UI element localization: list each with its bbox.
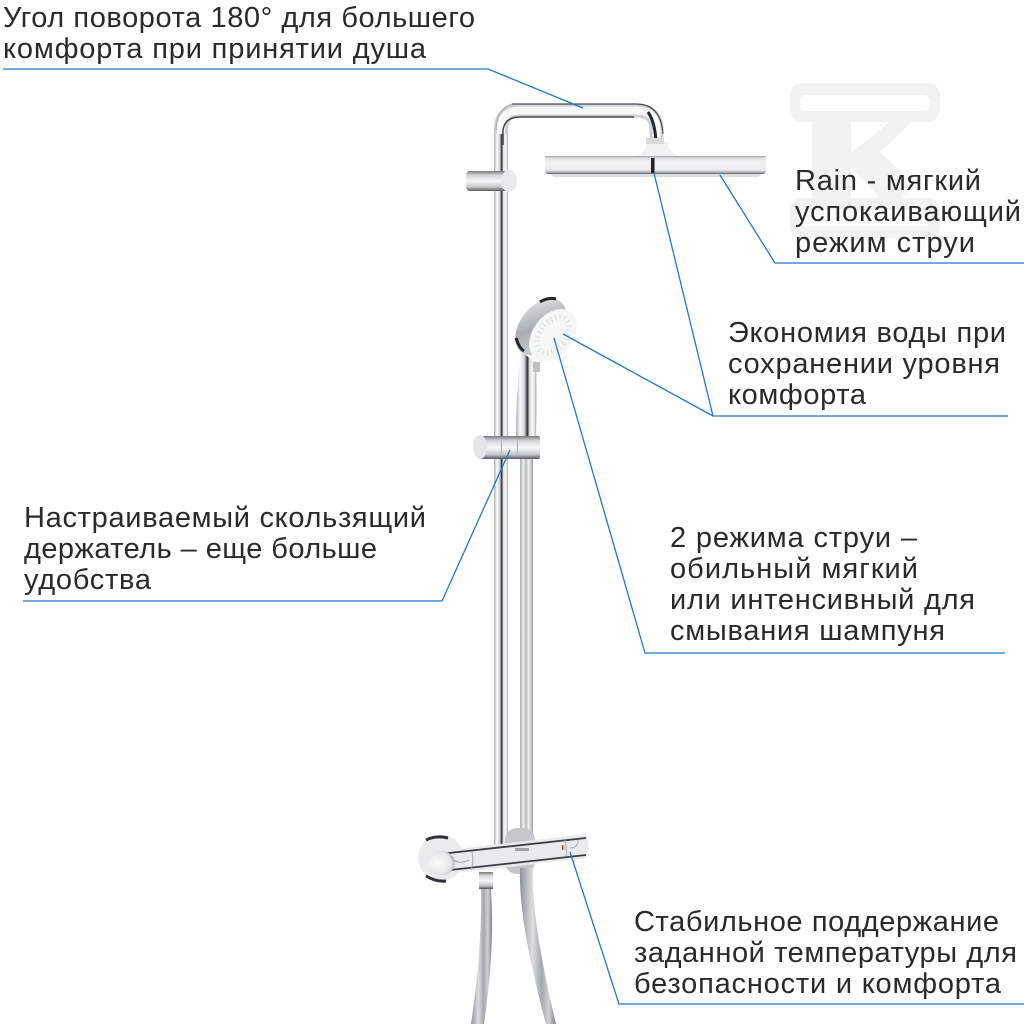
- watermark logo: [790, 83, 940, 238]
- thermostat mixer: [418, 828, 588, 881]
- callout: rain mode: режим струи: [795, 227, 975, 259]
- callout: swivel angle: комфорта при принятии душа: [3, 33, 427, 65]
- callout: rain mode: Rain - мягкий: [795, 165, 981, 197]
- callout: two spray modes: 2 режима струи –: [670, 522, 918, 554]
- overhead shower head: [545, 138, 766, 177]
- callout: stable temperature: Стабильное поддержание: [634, 906, 999, 938]
- callout: swivel angle: Угол поворота 180° для большего: [3, 2, 475, 34]
- rail bracket: [466, 170, 517, 192]
- callout: stable temperature: [570, 852, 1024, 1004]
- callout: two spray modes: смывания шампуня: [670, 615, 945, 647]
- hand shower: [505, 289, 587, 436]
- callout: water saving: сохранении уровня: [728, 348, 1000, 380]
- shower hoses: [471, 868, 556, 1024]
- callout: sliding holder: держатель – еще больше: [24, 533, 377, 565]
- callout: stable temperature: безопасности и комфорта: [634, 968, 1002, 1000]
- callout: water saving: комфорта: [728, 379, 867, 411]
- callout: stable temperature: заданной температуры для: [634, 937, 1017, 969]
- callout: sliding holder: удобства: [24, 564, 152, 596]
- callout: rain mode: [720, 165, 1024, 263]
- callout: sliding holder: Настраиваемый скользящий: [24, 502, 426, 534]
- callout: two spray modes: или интенсивный для: [670, 584, 975, 616]
- callout: rain mode: успокаивающий: [795, 196, 1021, 228]
- callout: water saving: Экономия воды при: [728, 317, 1006, 349]
- sliding holder: [473, 435, 540, 459]
- callout: swivel angle: [3, 2, 583, 108]
- callout: sliding holder: [23, 450, 510, 601]
- shower rail and overhead arm: [494, 104, 663, 860]
- callout: two spray modes: [554, 338, 1005, 653]
- callout: two spray modes: обильный мягкий: [670, 553, 918, 585]
- callout: water saving: [563, 173, 1008, 416]
